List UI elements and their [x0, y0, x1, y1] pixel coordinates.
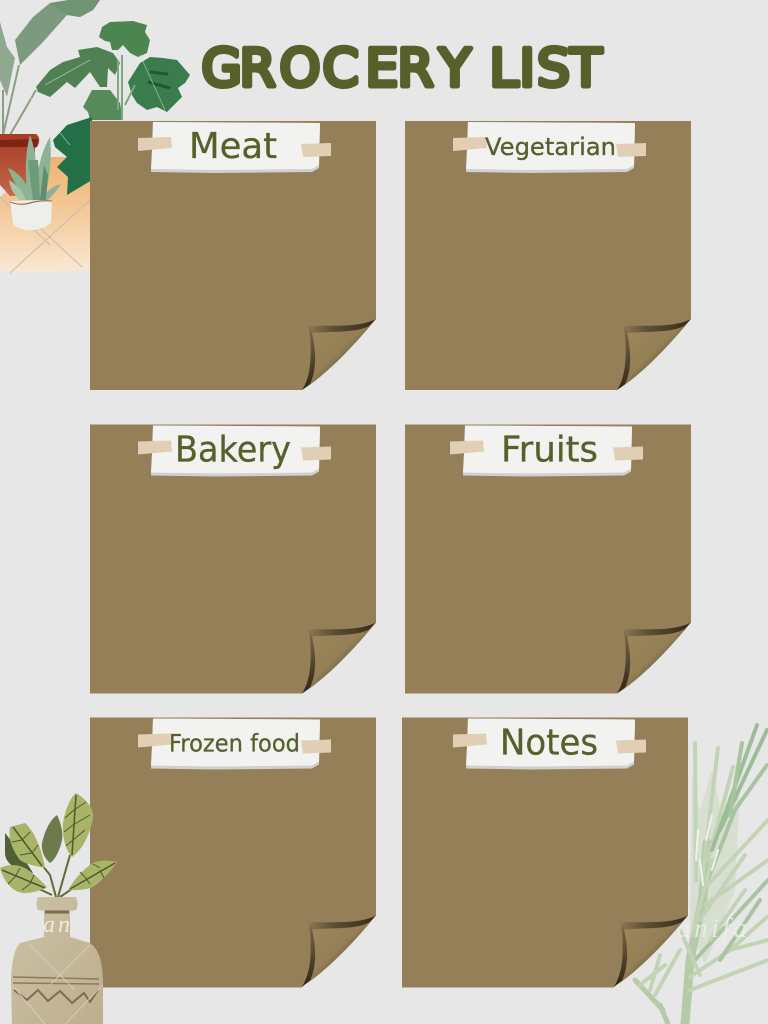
white pot — [10, 200, 52, 230]
panel: bakery — [90, 424, 376, 694]
panel: fruits — [405, 424, 691, 694]
red pot — [0, 134, 39, 196]
panel: vegetarian: Vegetarian — [485, 133, 616, 161]
illustration: pale fern bottom right — [635, 725, 768, 1024]
panel: vegetarian — [405, 121, 691, 390]
succulent — [8, 135, 61, 202]
watermark: an — [43, 912, 70, 938]
panel: meat: Meat — [189, 126, 277, 167]
panel: fruits: Fruits — [501, 430, 598, 470]
illustration: vase plant bottom left — [0, 793, 117, 1024]
floor patch — [0, 157, 95, 273]
panel: bakery: Bakery — [175, 430, 291, 470]
panel: notes — [402, 718, 688, 988]
panel: frozen food — [90, 718, 376, 988]
illustration: pale fern bottom right: anifa — [677, 913, 747, 943]
panel: meat — [90, 121, 376, 390]
vase body — [11, 897, 103, 1024]
title: GROCERY LIST — [202, 39, 602, 99]
panel: notes: Notes — [500, 722, 598, 764]
illustration: potted plants top left — [0, 0, 190, 273]
panel: frozen food: Frozen food — [169, 730, 300, 758]
